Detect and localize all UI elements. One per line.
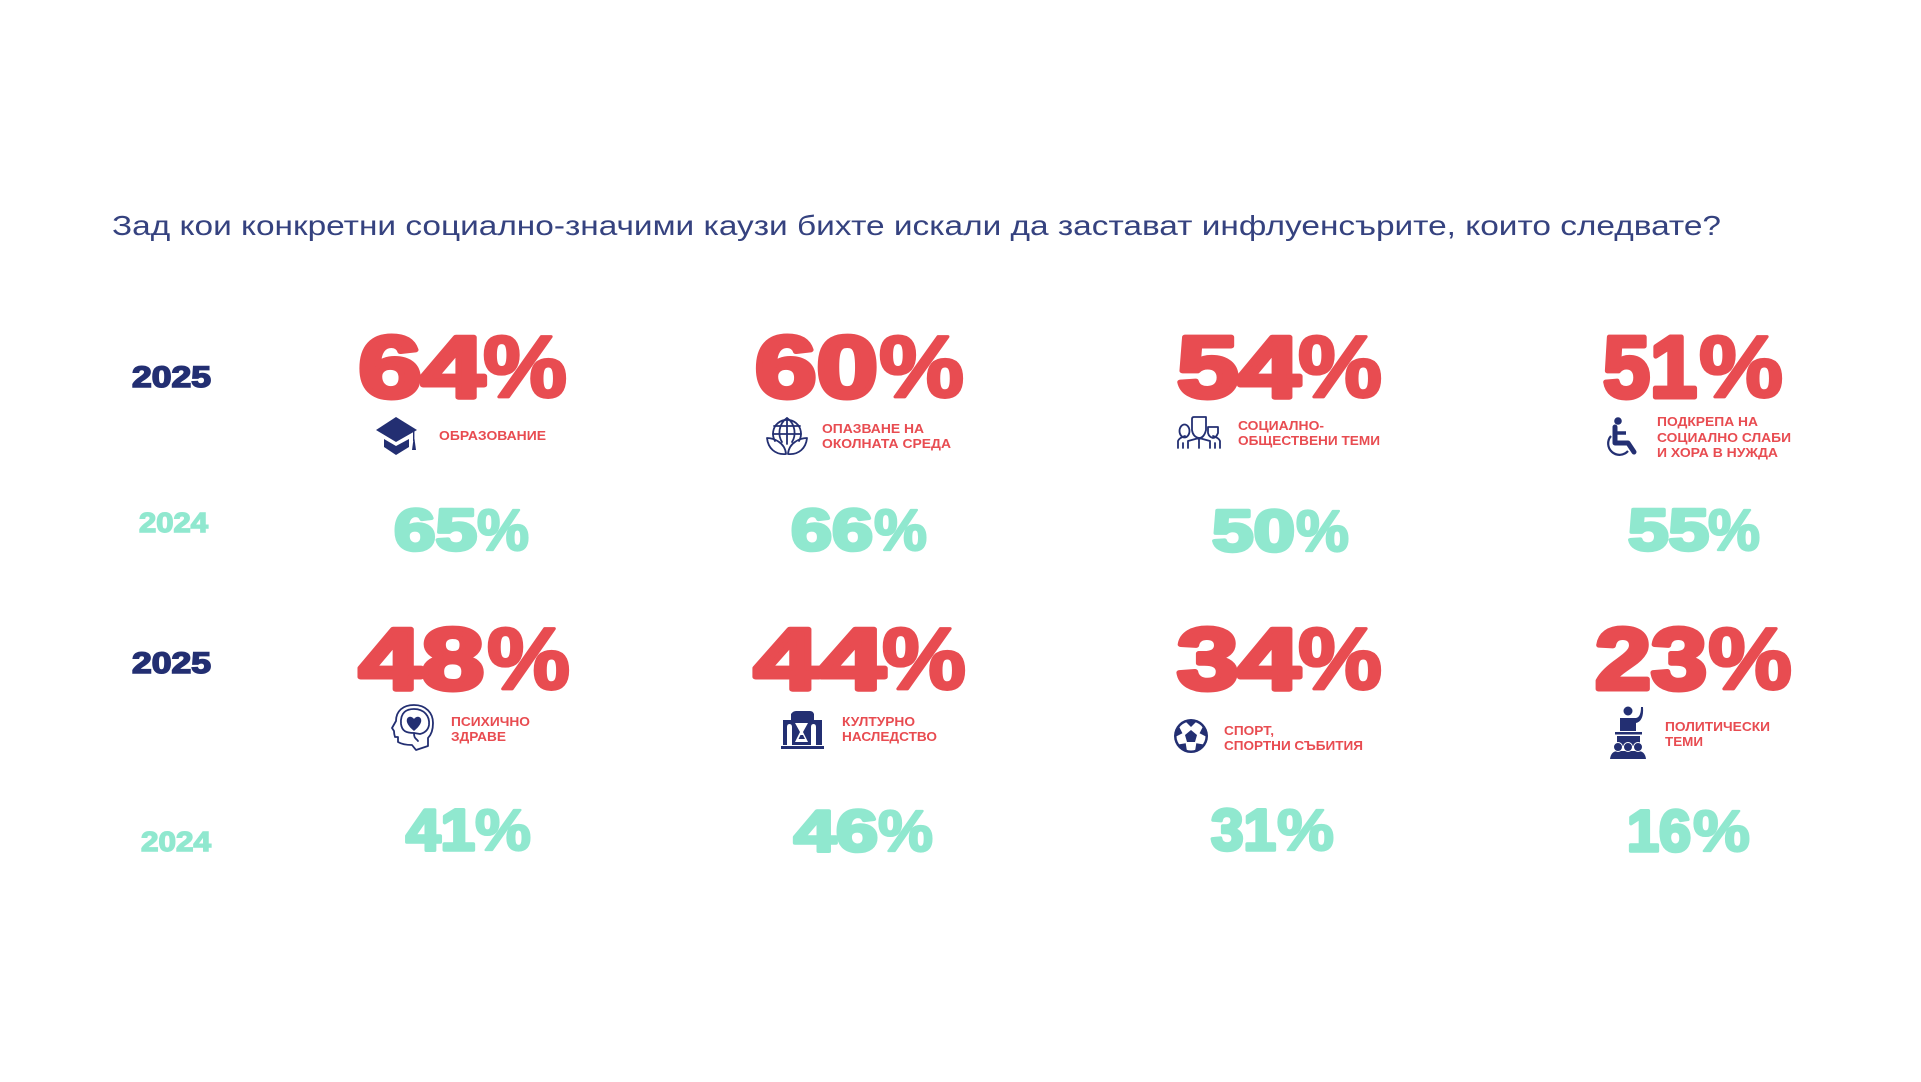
panel: social topics [1177, 319, 1382, 564]
value 2024: mental health: % [475, 798, 531, 863]
value 2024: politics [1627, 799, 1750, 864]
panel: social support: СОЦИАЛНО СЛАБИ [1657, 430, 1791, 445]
panel: politics: ТЕМИ [1665, 734, 1703, 749]
value 2024: social support: % [1708, 498, 1760, 563]
value 2025: politics: 23 [1595, 611, 1707, 708]
label: mental health: ПСИХИЧНО [451, 714, 530, 729]
value 2025: education: 64 [358, 319, 484, 416]
year label: 2025 row one: 2025 [132, 361, 211, 394]
value 2024: social support: 55 [1628, 498, 1709, 563]
value 2025: politics [1595, 611, 1792, 708]
value 2025: social topics: % [1298, 319, 1382, 416]
panel: social topics: ОБЩЕСТВЕНИ ТЕМИ [1238, 433, 1380, 448]
panel: education [358, 319, 567, 563]
value 2024: education: % [477, 498, 529, 563]
value 2025: cultural heritage: 44 [754, 611, 885, 708]
value 2025: education [358, 319, 567, 416]
value 2025: mental health [359, 611, 570, 708]
panel: environment: ОКОЛНАТА СРЕДА [822, 436, 952, 451]
value 2024: politics: % [1693, 799, 1750, 864]
panel: politics [1595, 611, 1792, 864]
icon: head with heart [392, 705, 433, 750]
label: cultural heritage: КУЛТУРНО [842, 714, 915, 729]
value 2024: cultural heritage: % [878, 799, 933, 864]
value 2025: social topics [1177, 319, 1382, 416]
value 2024: politics: 16 [1627, 799, 1691, 864]
panel: cultural heritage: НАСЛЕДСТВО [842, 729, 937, 744]
value 2025: environment: 60 [755, 319, 878, 416]
value 2025: education: % [483, 319, 567, 416]
value 2025: social support: 51 [1603, 319, 1697, 416]
value 2025: mental health: 48 [359, 611, 484, 708]
label: environment: ОПАЗВАНЕ НА [822, 421, 925, 436]
value 2025: social support [1603, 319, 1783, 416]
value 2024: sport [1211, 798, 1334, 863]
value 2025: cultural heritage: % [882, 611, 966, 708]
icon: wheelchair user [1608, 417, 1634, 455]
value 2024: environment [791, 498, 927, 563]
value 2025: cultural heritage [754, 611, 966, 708]
panel: social support [1603, 319, 1791, 563]
icon: football [1174, 719, 1208, 753]
label: social topics: СОЦИАЛНО- [1238, 418, 1324, 433]
icon: globe with leaves [767, 418, 807, 454]
label: education: ОБРАЗОВАНИЕ [439, 428, 546, 443]
value 2024: education [394, 498, 529, 563]
panel: social support: И ХОРА В НУЖДА [1657, 445, 1779, 460]
value 2025: social support: % [1699, 319, 1783, 416]
value 2024: cultural heritage [794, 799, 933, 864]
value 2025: mental health: % [487, 611, 570, 708]
label: sport: СПОРТ, [1224, 723, 1274, 738]
value 2024: cultural heritage: 46 [794, 799, 878, 864]
icon: group of people [1178, 417, 1220, 448]
value 2025: environment [755, 319, 964, 416]
panel: mental health [359, 611, 570, 863]
value 2024: social topics: 50 [1212, 499, 1295, 564]
panel: sport: СПОРТНИ СЪБИТИЯ [1224, 738, 1363, 753]
value 2025: sport: % [1298, 611, 1382, 708]
icon: graduation cap [376, 417, 417, 455]
value 2024: environment: 66 [791, 498, 873, 563]
year label: 2025 row two: 2025 [132, 647, 211, 680]
value 2024: mental health: 41 [406, 798, 475, 863]
value 2024: education: 65 [394, 498, 477, 563]
value 2025: sport [1177, 611, 1382, 708]
panel: sport [1174, 611, 1382, 863]
value 2025: politics: % [1708, 611, 1792, 708]
label: social support: ПОДКРЕПА НА [1657, 414, 1759, 429]
value 2024: mental health [406, 798, 531, 863]
value 2024: social topics: % [1296, 499, 1349, 564]
value 2024: social topics [1212, 499, 1349, 564]
icon: heritage building with hourglass [781, 711, 824, 749]
value 2024: sport: 31 [1211, 798, 1276, 863]
panel: cultural heritage [754, 611, 966, 864]
value 2025: sport: 34 [1177, 611, 1300, 708]
panel: environment [755, 319, 964, 563]
value 2025: environment: % [879, 319, 964, 416]
value 2025: social topics: 54 [1177, 319, 1300, 416]
title: Зад кои конкретни социално-значими каузи бихте искали да застават инфлуенсърите, които следвате? [112, 210, 1721, 241]
value 2024: environment: % [874, 498, 927, 563]
value 2024: social support [1628, 498, 1760, 563]
icon: speaker at podium with audience [1610, 706, 1646, 759]
panel: mental health: ЗДРАВЕ [451, 729, 506, 744]
year label: 2024 row two: 2024 [141, 826, 211, 857]
value 2024: sport: % [1277, 798, 1334, 863]
year label: 2024 row one: 2024 [139, 507, 208, 538]
label: politics: ПОЛИТИЧЕСКИ [1665, 719, 1770, 734]
